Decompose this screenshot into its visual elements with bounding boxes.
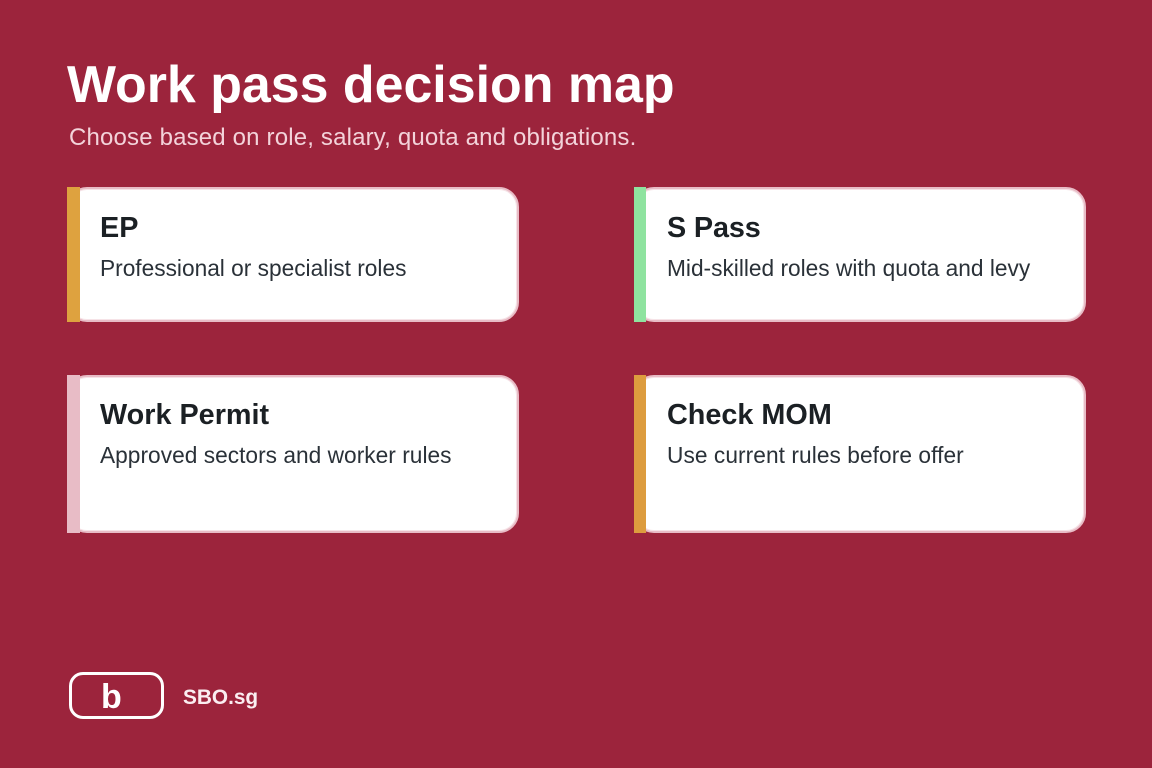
brand name: SBO.sg bbox=[183, 686, 258, 709]
panel: Check MOM bbox=[634, 375, 1086, 533]
panel: Check MOM: Check MOM bbox=[667, 399, 832, 431]
logo mark bbox=[69, 672, 164, 719]
panel: EP: Professional or specialist roles bbox=[100, 255, 406, 281]
panel: Check MOM: Use current rules before offer bbox=[667, 442, 964, 468]
subtitle: Choose based on role, salary, quota and obligations. bbox=[69, 124, 636, 151]
panel: Work Permit: Work Permit bbox=[100, 399, 269, 431]
panel: EP bbox=[67, 187, 519, 322]
panel: S Pass: S Pass bbox=[667, 212, 761, 244]
panel: S Pass: Mid-skilled roles with quota and levy bbox=[667, 255, 1030, 281]
logo mark: b bbox=[101, 678, 122, 716]
panel: EP: EP bbox=[100, 212, 138, 244]
panel: Work Permit bbox=[67, 375, 519, 533]
title: Work pass decision map bbox=[67, 55, 675, 113]
panel: Work Permit: Approved sectors and worker rules bbox=[100, 442, 452, 468]
panel: S Pass bbox=[634, 187, 1086, 322]
